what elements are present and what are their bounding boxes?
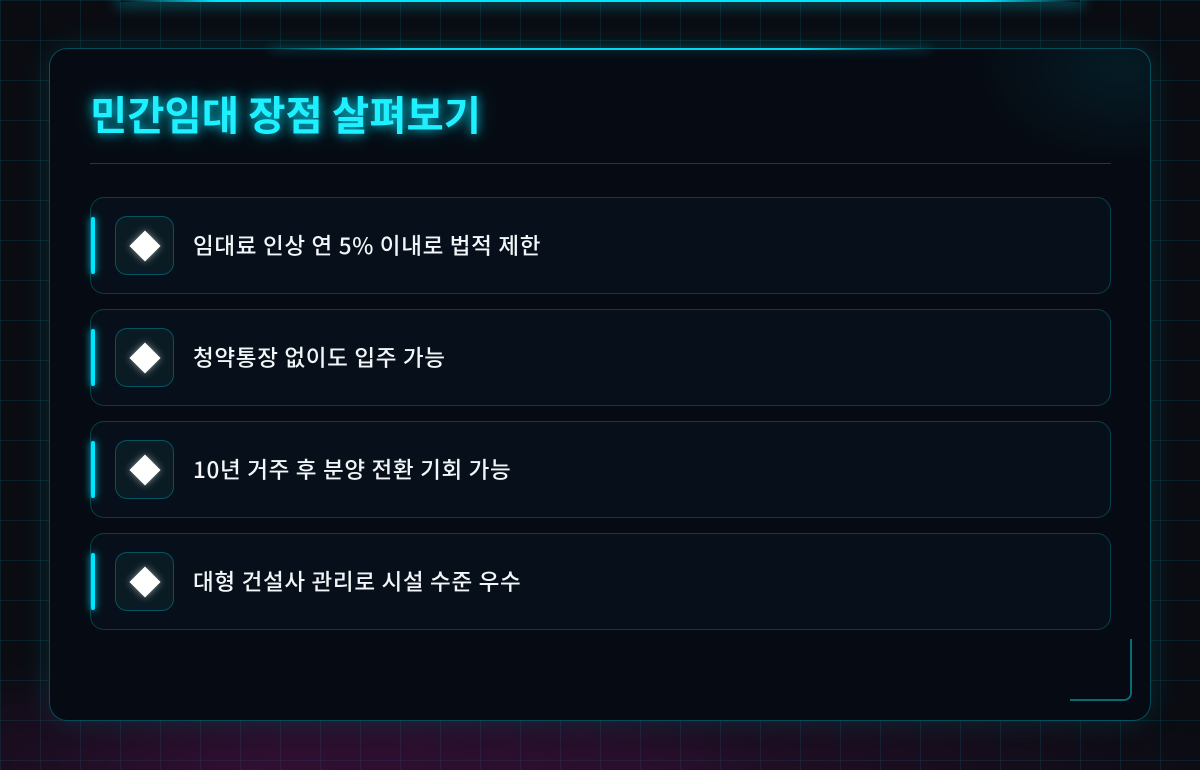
item 3 xyxy=(90,421,1111,518)
text: 청약통장 없이도 입주 가능 xyxy=(193,341,446,373)
item 2 xyxy=(90,309,1111,406)
text: 대형 건설사 관리로 시설 수준 우수 xyxy=(193,565,521,597)
icon: diamond xyxy=(115,328,174,387)
item 4 xyxy=(90,533,1111,630)
icon: diamond xyxy=(115,552,174,611)
item 1 xyxy=(90,197,1111,294)
title: 민간임대 장점 살펴보기 xyxy=(90,83,481,142)
icon: diamond xyxy=(115,216,174,275)
text: 10년 거주 후 분양 전환 기회 가능 xyxy=(193,453,511,485)
text: 임대료 인상 연 5% 이내로 법적 제한 xyxy=(193,229,541,261)
corner bracket xyxy=(1070,639,1132,701)
icon: diamond xyxy=(115,440,174,499)
